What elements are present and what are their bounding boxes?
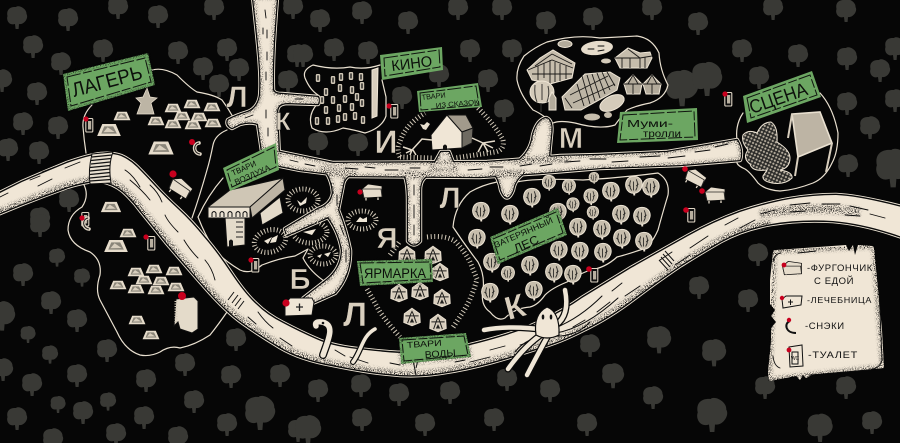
sign: ЛАГЕРЬ: ЛАГЕРЬ	[70, 62, 145, 102]
legend row: toilet: -ТУАЛЕТ	[808, 350, 858, 361]
sign: ЗАТЕРЯННЫЙ ЛЕС: ЗАТЕРЯННЫЙ	[492, 214, 554, 250]
sign: Муми-тролли: тролли	[643, 128, 681, 140]
air creatures zone: arch building	[208, 178, 285, 247]
big road letters	[226, 81, 583, 334]
cinema	[315, 68, 378, 125]
stage	[743, 112, 832, 183]
sign: ТВАРИ ИЗ СКАЗОК: ТВАРИ	[421, 91, 446, 102]
legend row: food truck	[782, 261, 873, 287]
moomin valley buildings	[527, 39, 661, 120]
river	[0, 154, 900, 375]
roads	[228, 0, 741, 306]
sign: ТВАРИ ИЗ СКАЗОК: ИЗ СКАЗОК	[436, 99, 480, 110]
sign: ТВАРИ ИЗ СКАЗОК	[417, 83, 482, 112]
sign: ЗАТЕРЯННЫЙ ЛЕС: ЛЕС	[512, 232, 541, 256]
lost forest trees	[469, 172, 659, 303]
sign: СЦЕНА: СЦЕНА	[747, 79, 811, 119]
clinic	[285, 298, 314, 316]
big road letters: Л	[226, 81, 248, 114]
big road letters: К	[500, 286, 530, 327]
sign: ЯРМАРКА	[357, 259, 433, 286]
legend row: clinic: -ЛЕЧЕБНИЦА	[807, 295, 872, 305]
hatched ovals with creatures	[252, 189, 376, 264]
legend row: food truck: -ФУРГОНЧИК	[807, 263, 873, 274]
big road letters: К	[275, 108, 291, 136]
legend row: toilet	[787, 345, 858, 367]
icon: camp figure	[136, 88, 157, 114]
map icons: services	[79, 91, 732, 333]
water creatures: serpents	[316, 322, 375, 362]
fair tents	[367, 236, 477, 337]
sign: КИНО: КИНО	[390, 53, 433, 75]
big road letters: Б	[290, 264, 310, 296]
snack icons	[84, 143, 200, 229]
sign: ТВАРИ ВОДЫ: ТВАРИ	[406, 338, 442, 350]
toilet icons	[82, 92, 732, 333]
big road letters: Л	[343, 296, 367, 334]
sign: Муми-тролли: Муми-	[627, 118, 674, 130]
sign: ТВАРИ ВОЗДУХА	[223, 143, 279, 191]
zone: camp tents	[98, 88, 221, 339]
fairy tale creatures zone: hut on legs	[398, 108, 503, 158]
legend row: toilet: WC	[791, 356, 800, 362]
sign: ТВАРИ ВОДЫ: ВОДЫ	[424, 348, 456, 361]
legend row: food truck: С ЕДОЙ	[814, 275, 854, 287]
sign: ТВАРИ ВОЗДУХА: ВОЗДУХА	[233, 163, 272, 187]
sign: Муми-тролли	[617, 108, 698, 143]
bridge	[89, 152, 113, 184]
sign: КИНО	[380, 47, 443, 80]
sign: ТВАРИ ВОДЫ	[399, 333, 471, 364]
big road letters: Л	[439, 182, 461, 215]
sign: ЗАТЕРЯННЫЙ ЛЕС	[490, 208, 567, 264]
crowd	[743, 122, 792, 183]
legend row: snacks: -СНЭКИ	[805, 321, 845, 332]
big road letters: И	[374, 124, 398, 160]
big road letters: Я	[377, 223, 397, 255]
sign: ЯРМАРКА: ЯРМАРКА	[364, 266, 426, 281]
sign: ТВАРИ ВОЗДУХА: ТВАРИ	[230, 159, 258, 178]
red location dots	[79, 91, 728, 307]
legend panel	[768, 245, 884, 381]
food trucks	[166, 166, 725, 204]
octopus	[484, 290, 618, 375]
zone boundaries	[68, 36, 838, 356]
sign: ЛАГЕРЬ	[63, 53, 155, 111]
big road letters: М	[559, 123, 583, 155]
